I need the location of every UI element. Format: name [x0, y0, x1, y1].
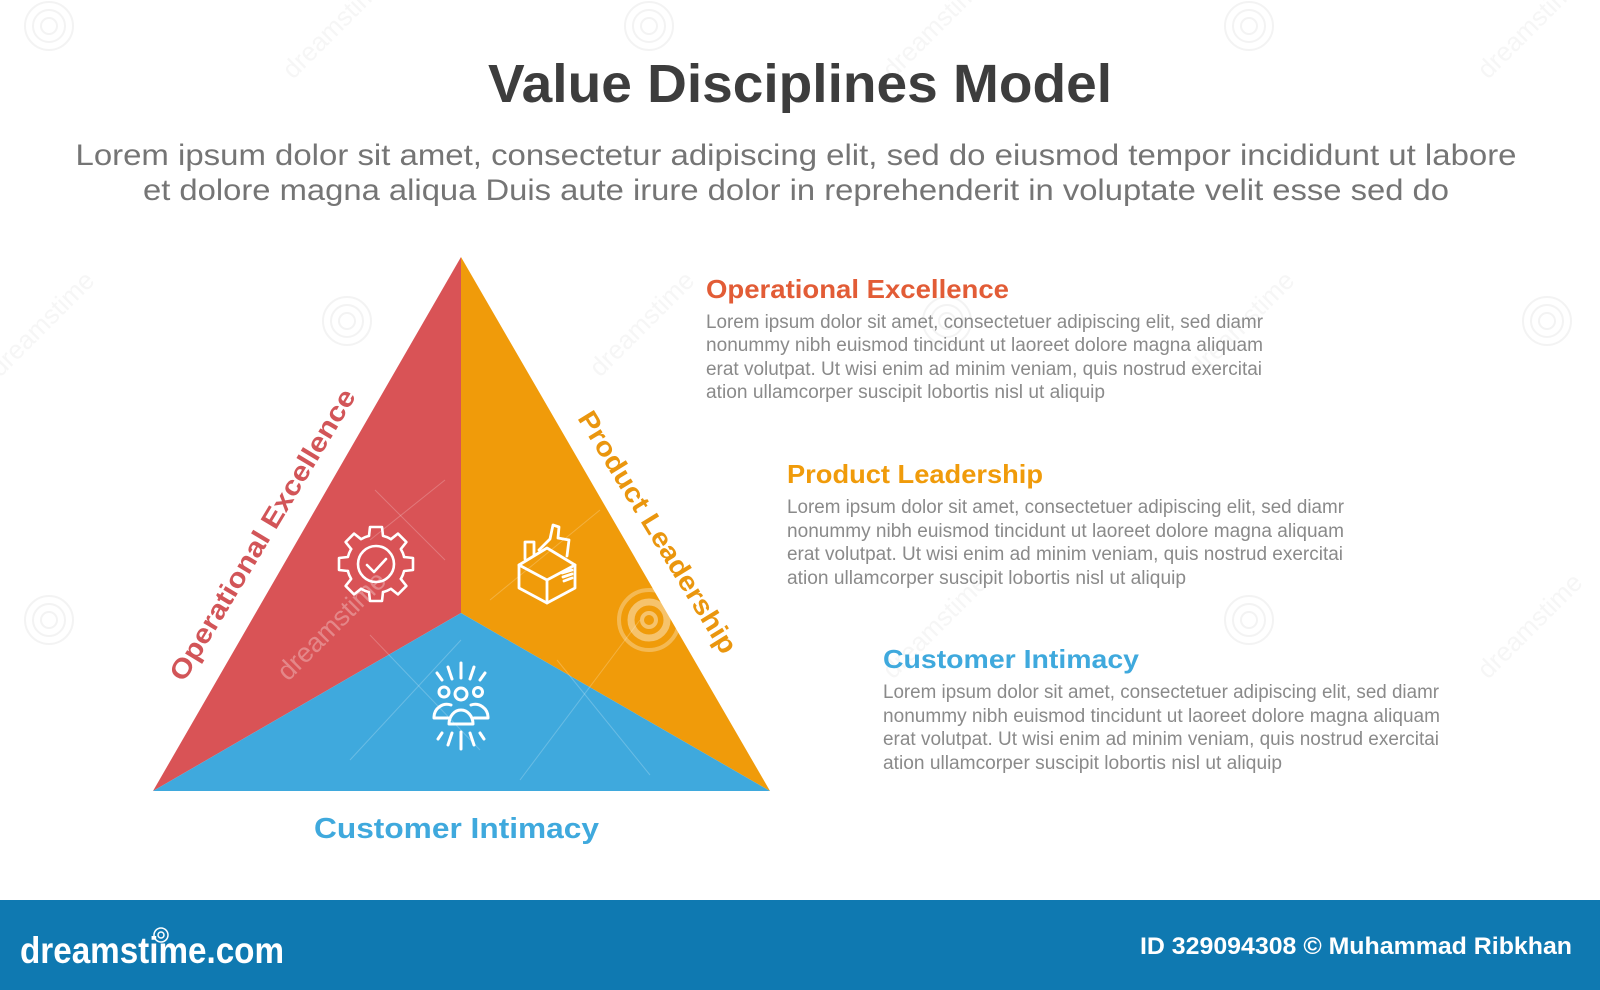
- body text: Lorem ipsum dolor sit amet, consectetuer adipiscing elit, sed diamr: [883, 682, 1440, 703]
- body text: erat volutpat. Ut wisi enim ad minim veniam, quis nostrud exercitai: [706, 359, 1262, 380]
- icon: box with thumbs up: [519, 525, 575, 603]
- body text: [706, 312, 1264, 403]
- heading: Customer Intimacy: [883, 644, 1140, 674]
- body text: ation ullamcorper suscipit lobortis nisl ut aliquip: [883, 753, 1282, 774]
- body text: [883, 682, 1440, 774]
- body text: nonummy nibh euismod tincidunt ut laoreet dolore magna aliquam: [883, 706, 1440, 727]
- body text: nonummy nibh euismod tincidunt ut laoreet dolore magna aliquam: [706, 335, 1263, 356]
- body text: Lorem ipsum dolor sit amet, consectetuer adipiscing elit, sed diamr: [706, 312, 1264, 333]
- title: Value Disciplines Model: [488, 54, 1112, 114]
- segment: customer intimacy: [153, 613, 770, 791]
- subtitle text block: Lorem ipsum dolor sit amet, consectetur adipiscing elit, sed do eiusmod tempor incididunt ut labore: [76, 139, 1516, 172]
- label: operational excellence on left edge: Operational Excellence: [163, 383, 362, 686]
- body text: ation ullamcorper suscipit lobortis nisl ut aliquip: [706, 382, 1105, 403]
- triangle chart: [153, 257, 770, 791]
- text: dreamstime: [1471, 567, 1588, 684]
- segment: product leadership: [461, 257, 770, 791]
- body text: erat volutpat. Ut wisi enim ad minim veniam, quis nostrud exercitai: [787, 544, 1343, 565]
- text: dreamstime: [876, 567, 993, 684]
- icon: people with rays: [434, 663, 488, 749]
- panel: product leadership description: [787, 459, 1345, 589]
- footer band: [0, 900, 1600, 990]
- text: dreamstime: [1183, 265, 1300, 382]
- panel: customer intimacy description: [883, 644, 1440, 774]
- text: dreamstime: [583, 265, 700, 382]
- triangle chart: dreamstime: [271, 565, 392, 686]
- body text: [787, 497, 1345, 589]
- subtitle text block: et dolore magna aliqua Duis aute irure dolor in reprehenderit in voluptate velit esse sed do: [143, 174, 1449, 207]
- icon: logo spiral: [154, 928, 168, 942]
- subtitle text block: [76, 139, 1516, 207]
- body text: erat volutpat. Ut wisi enim ad minim veniam, quis nostrud exercitai: [883, 729, 1439, 750]
- body text: Lorem ipsum dolor sit amet, consectetuer adipiscing elit, sed diamr: [787, 497, 1345, 518]
- body text: nonummy nibh euismod tincidunt ut laoreet dolore magna aliquam: [787, 521, 1344, 542]
- heading: Operational Excellence: [706, 274, 1009, 304]
- watermark logo text: dreamstime.com: [20, 930, 284, 971]
- segment: operational excellence: [153, 257, 461, 791]
- icon: gear with check: [339, 527, 413, 601]
- label: customer intimacy under triangle: Customer Intimacy: [314, 813, 599, 845]
- body text: ation ullamcorper suscipit lobortis nisl ut aliquip: [787, 568, 1186, 589]
- image credit: ID 329094308 © Muhammad Ribkhan: [1140, 933, 1572, 960]
- label: product leadership on right edge: Product Leadership: [572, 405, 743, 659]
- panel: operational excellence description: [706, 274, 1264, 403]
- heading: Product Leadership: [787, 459, 1043, 489]
